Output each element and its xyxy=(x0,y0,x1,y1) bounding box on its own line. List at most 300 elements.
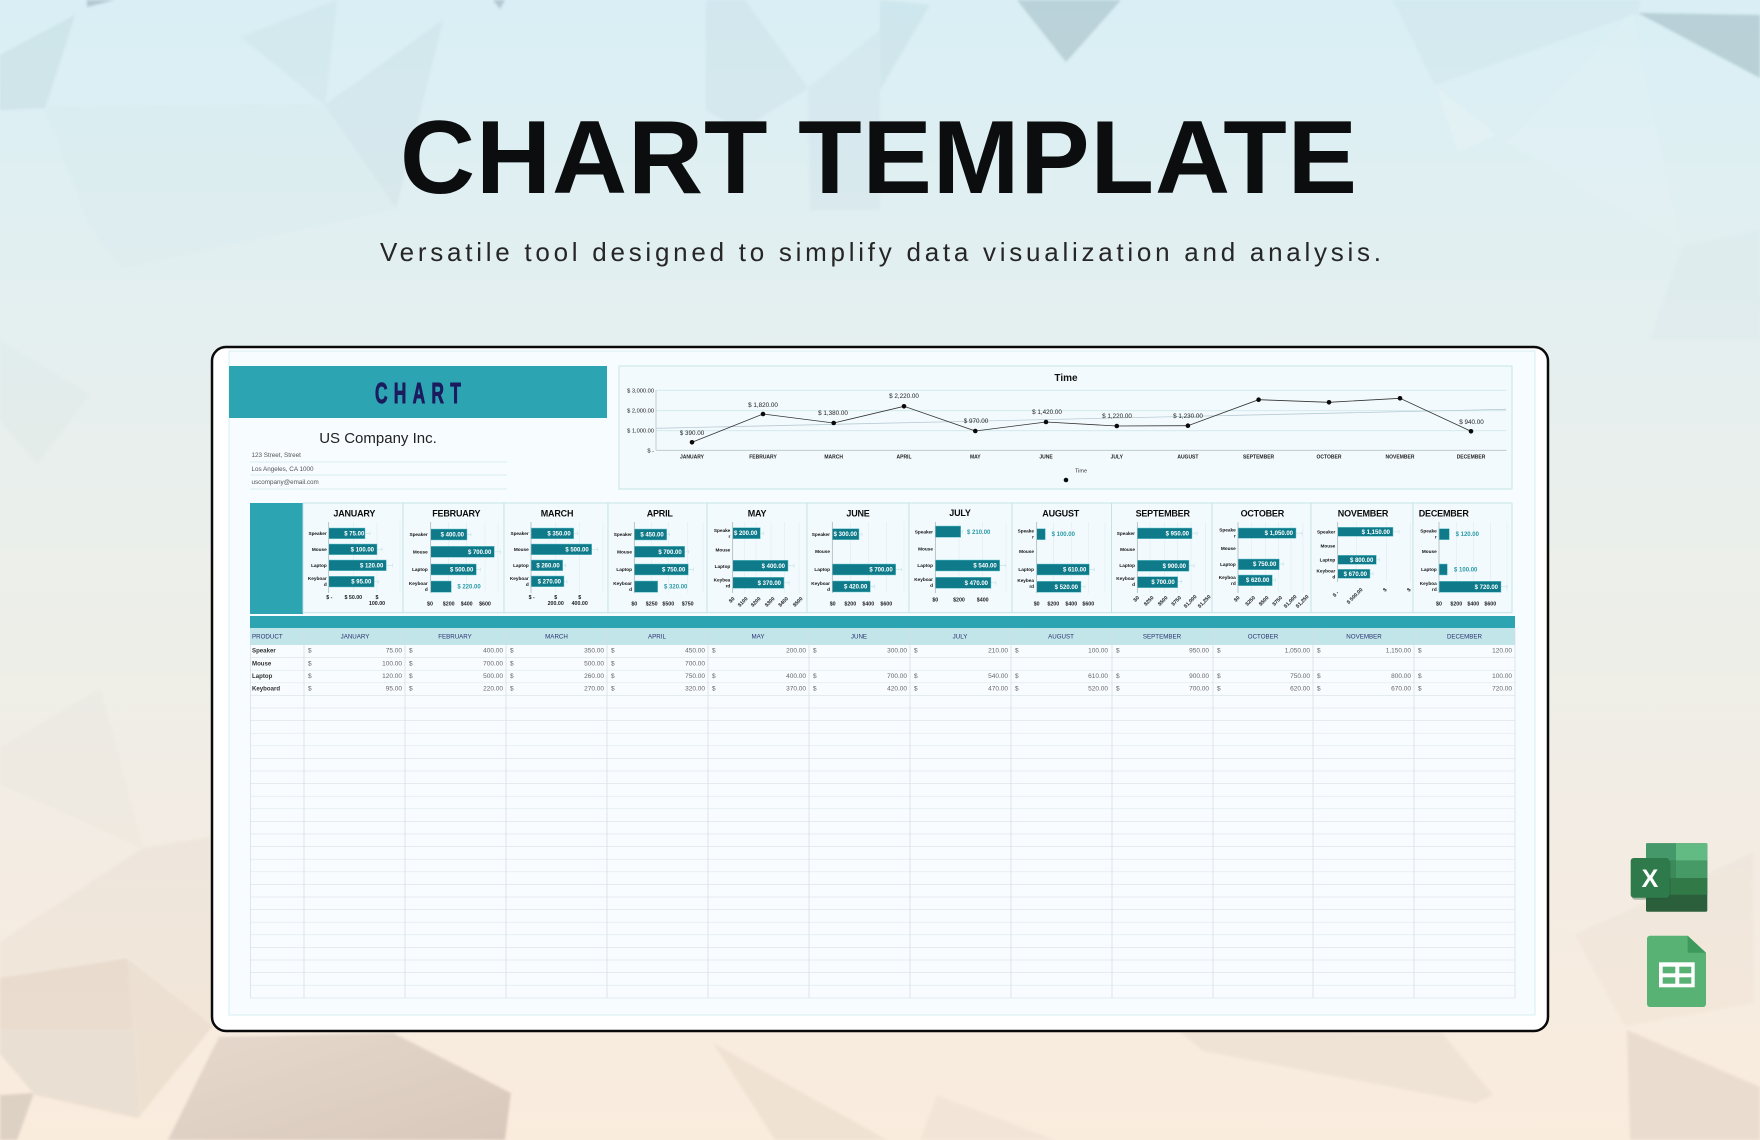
table header row: JUNE xyxy=(851,633,867,640)
month chart: September: $250 xyxy=(1143,595,1155,608)
month chart: March: Keyboar xyxy=(510,576,529,581)
month chart: December: $0 xyxy=(1436,602,1442,608)
line chart: Time: $ 2,000.00 xyxy=(627,408,654,414)
month chart: May: rd xyxy=(726,584,730,588)
month chart: September: $1,250 xyxy=(1197,594,1212,610)
month chart: March: Laptop xyxy=(513,563,529,568)
table row: Mouse: $ xyxy=(510,660,514,667)
table row: Speaker: $ xyxy=(1116,648,1120,655)
line chart: Time: $ 940.00 xyxy=(1459,419,1484,426)
line chart: Time: $ 1,380.00 xyxy=(818,410,848,417)
month chart: February xyxy=(403,503,504,613)
month chart: December: $400 xyxy=(1467,602,1479,608)
table row: Laptop: 500.00 xyxy=(483,673,503,680)
month chart: February: $ 400.00 xyxy=(441,532,465,538)
month chart: August: $ 100.00 xyxy=(1052,532,1076,538)
line chart: Time: FEBRUARY xyxy=(749,454,777,460)
table row: Speaker: 450.00 xyxy=(685,648,705,655)
month chart: December: DECEMBER xyxy=(1419,508,1469,518)
month chart: October: OCTOBER xyxy=(1241,508,1285,518)
line chart: Time: $ 1,230.00 xyxy=(1173,413,1203,420)
month chart: April xyxy=(608,503,707,613)
month chart: May: $ 370.00 xyxy=(758,581,782,587)
month chart: August: Keybea xyxy=(1017,578,1034,583)
table row: Laptop: $ xyxy=(1116,673,1120,680)
table row: Laptop: $ xyxy=(308,673,312,680)
line chart: Time: $ 3,000.00 xyxy=(627,388,654,394)
icon: Excel xyxy=(1631,843,1707,912)
month chart: December: $ 100.00 xyxy=(1454,568,1478,574)
month chart: May: $500 xyxy=(792,596,804,609)
icon: Google Sheets xyxy=(1647,936,1706,1007)
month chart: September: SEPTEMBER xyxy=(1136,508,1190,518)
table row: Keyboard: $ xyxy=(914,686,918,693)
month chart: May: $200 xyxy=(750,596,762,609)
data table xyxy=(250,616,1515,998)
line chart: Time: $ 1,220.00 xyxy=(1102,413,1132,420)
month chart: November: Laptop xyxy=(1320,558,1335,562)
month chart: June: d xyxy=(827,587,830,592)
month chart: April: $ 320.00 xyxy=(664,585,688,591)
month chart: May: $400 xyxy=(778,596,790,609)
month chart: August: AUGUST xyxy=(1042,508,1080,518)
month chart: May: Laptop xyxy=(715,564,730,569)
month chart: June: Laptop xyxy=(814,567,830,572)
table row: Keyboard: 700.00 xyxy=(1189,686,1209,693)
table row: Speaker: 1,050.00 xyxy=(1285,648,1310,655)
table row: Mouse: Mouse xyxy=(252,660,272,667)
month chart: September: Keyboar xyxy=(1116,576,1135,581)
table row: Keyboard: $ xyxy=(510,686,514,693)
table row: Keyboard xyxy=(252,686,1512,693)
month chart: April: $750 xyxy=(682,602,694,608)
month chart: April: d xyxy=(629,587,632,592)
month chart: August: $600 xyxy=(1082,602,1094,608)
month chart: January: Keyboar xyxy=(308,576,327,581)
month chart: December: Laptop xyxy=(1421,567,1437,572)
table row: Keyboard: Keyboard xyxy=(252,686,280,693)
month chart: March: $ 260.00 xyxy=(536,563,560,569)
month chart: May: MAY xyxy=(748,508,766,518)
month chart: May: $300 xyxy=(764,596,776,609)
month chart: November: $ xyxy=(1382,587,1388,593)
table row: Laptop: $ xyxy=(1217,673,1221,680)
month chart: April: Laptop xyxy=(616,567,632,572)
month chart: January: Speaker xyxy=(308,531,327,536)
month chart: October: Speake xyxy=(1219,528,1236,532)
month chart: October: $500 xyxy=(1258,595,1270,608)
line chart: Time: MARCH xyxy=(824,454,843,460)
table row: Laptop: 120.00 xyxy=(382,673,402,680)
line chart: Time: AUGUST xyxy=(1177,454,1198,460)
month chart: July xyxy=(909,503,1012,613)
line chart: Time: $ 1,000.00 xyxy=(627,428,654,434)
month chart: December: Mouse xyxy=(1422,549,1437,554)
month chart: January xyxy=(303,503,403,613)
month chart: July: $ 210.00 xyxy=(967,530,991,536)
month chart: January: $ 75.00 xyxy=(344,531,365,537)
month chart: August: r xyxy=(1032,534,1034,540)
month chart: September xyxy=(1112,503,1212,613)
table row: Laptop: $ xyxy=(914,673,918,680)
month chart: June: $600 xyxy=(880,602,892,608)
month chart: March: Speaker xyxy=(510,531,529,536)
table row: Laptop: 750.00 xyxy=(685,673,705,680)
table header row: OCTOBER xyxy=(1248,633,1279,640)
table row: Mouse: 700.00 xyxy=(685,660,705,667)
table row: Keyboard: $ xyxy=(712,686,716,693)
table row: Laptop: $ xyxy=(611,673,615,680)
table row: Speaker: $ xyxy=(308,648,312,655)
month chart: January: $ 95.00 xyxy=(351,580,372,586)
month chart: March: 400.00 xyxy=(572,601,588,607)
line chart: Time: DECEMBER xyxy=(1457,454,1486,460)
month chart: September: $750 xyxy=(1171,595,1183,608)
month chart: May: $ 400.00 xyxy=(762,564,786,570)
table row: Speaker: 75.00 xyxy=(386,648,402,655)
month chart: January: $ 120.00 xyxy=(360,563,384,569)
table row: Keyboard: 620.00 xyxy=(1290,686,1310,693)
month chart: April: $250 xyxy=(646,602,658,608)
month chart: January: Laptop xyxy=(311,563,327,568)
table row: Laptop: 100.00 xyxy=(1492,673,1512,680)
table row: Laptop: 610.00 xyxy=(1088,673,1108,680)
line chart: Time: JULY xyxy=(1111,454,1124,460)
table row: Mouse: $ xyxy=(611,660,615,667)
line chart: Time: Time xyxy=(1054,373,1078,384)
table row: Speaker: $ xyxy=(813,648,817,655)
month chart: December xyxy=(1413,503,1512,613)
month chart: August: $0 xyxy=(1034,602,1040,608)
month chart: February: d xyxy=(425,587,428,592)
month chart: February: Laptop xyxy=(412,567,428,572)
line chart: Time: NOVEMBER xyxy=(1386,454,1415,460)
table row: Keyboard: 670.00 xyxy=(1391,686,1411,693)
table row: Keyboard: $ xyxy=(1418,686,1422,693)
month chart: October: $ 620.00 xyxy=(1246,578,1270,584)
month chart: November: $ 500.00 xyxy=(1346,587,1364,606)
table header row: PRODUCT xyxy=(252,633,283,640)
month chart: October: $750 xyxy=(1272,595,1284,608)
month chart: July: JULY xyxy=(949,508,971,518)
month chart: August: rd xyxy=(1029,584,1034,589)
month chart: August: $200 xyxy=(1047,602,1059,608)
line chart: Time: Time xyxy=(1075,469,1087,475)
table row: Speaker: 300.00 xyxy=(887,648,907,655)
table row: Keyboard: $ xyxy=(1217,686,1221,693)
month chart: December: Keyboa xyxy=(1420,581,1437,586)
table row: Keyboard: 420.00 xyxy=(887,686,907,693)
month chart: April: Keyboar xyxy=(613,581,632,586)
month chart: September: $ 950.00 xyxy=(1166,531,1190,537)
month chart: October: Mouse xyxy=(1221,546,1236,551)
month chart: March: MARCH xyxy=(541,508,573,518)
line chart: Time: $ 2,220.00 xyxy=(889,393,919,400)
table row: Speaker: $ xyxy=(611,648,615,655)
table row: Laptop: 260.00 xyxy=(584,673,604,680)
table row: Keyboard: 720.00 xyxy=(1492,686,1512,693)
month chart: April: Speaker xyxy=(614,532,632,537)
table row: Laptop: 700.00 xyxy=(887,673,907,680)
month chart: March: $ 500.00 xyxy=(565,547,589,553)
table row: Laptop: 400.00 xyxy=(786,673,806,680)
table row: Keyboard: $ xyxy=(409,686,413,693)
month chart: March: $ 270.00 xyxy=(538,579,562,585)
month chart: February: $200 xyxy=(443,602,455,608)
month chart: May: Speake xyxy=(714,528,731,533)
line chart: Time: JANUARY xyxy=(680,454,705,460)
month chart: October: Keyboa xyxy=(1219,575,1236,580)
month chart: May xyxy=(707,503,807,613)
month chart: June: Keyboar xyxy=(811,581,830,586)
month chart: November xyxy=(1311,503,1413,613)
month chart: July: $ 540.00 xyxy=(973,564,997,570)
table row: Speaker: 210.00 xyxy=(988,648,1008,655)
table row: Laptop: 540.00 xyxy=(988,673,1008,680)
table row: Laptop: $ xyxy=(510,673,514,680)
line chart: Time xyxy=(619,366,1512,489)
table row: Mouse: 500.00 xyxy=(584,660,604,667)
month chart: February: $ 700.00 xyxy=(468,550,492,556)
table row: Keyboard: 95.00 xyxy=(386,686,402,693)
month chart: October: $1,000 xyxy=(1283,594,1298,610)
month chart: December: $ 720.00 xyxy=(1475,585,1499,591)
month chart: June: $ 700.00 xyxy=(869,568,893,574)
month chart: May: $ 200.00 xyxy=(734,531,758,537)
table row: Speaker: 100.00 xyxy=(1088,648,1108,655)
month chart: October: $1,250 xyxy=(1295,594,1310,610)
table row: Mouse: $ xyxy=(308,660,312,667)
month chart: July: $0 xyxy=(932,597,938,603)
month chart: August: $ 520.00 xyxy=(1055,585,1079,591)
month chart: October xyxy=(1212,503,1311,613)
month chart: March: Mouse xyxy=(514,547,529,552)
table row: Keyboard: 370.00 xyxy=(786,686,806,693)
month chart: June: $400 xyxy=(862,602,874,608)
title: CHART TEMPLATE xyxy=(400,100,1357,216)
month chart: September: Speaker xyxy=(1117,531,1135,536)
month chart: July: $ 470.00 xyxy=(965,581,989,587)
table row: Laptop: $ xyxy=(712,673,716,680)
table row: Keyboard: 270.00 xyxy=(584,686,604,693)
month chart: March: $ xyxy=(578,595,581,601)
month chart: December: rd xyxy=(1432,587,1437,592)
table header row: JANUARY xyxy=(341,633,369,640)
table row: Laptop: $ xyxy=(1317,673,1321,680)
month chart: April: APRIL xyxy=(647,508,673,518)
table row: Speaker: $ xyxy=(409,648,413,655)
month chart: October: rd xyxy=(1231,581,1236,586)
month chart: January: $ 100.00 xyxy=(351,547,375,553)
month chart: October: $250 xyxy=(1245,595,1257,608)
month chart: February: $400 xyxy=(461,602,473,608)
month chart: August: $400 xyxy=(1065,602,1077,608)
month chart: September: $ 700.00 xyxy=(1151,580,1175,586)
month chart: June: Mouse xyxy=(815,549,830,554)
company block xyxy=(250,430,507,489)
month chart: April: $ 750.00 xyxy=(662,568,686,574)
month chart: March: 200.00 xyxy=(548,601,564,607)
table row: Speaker: $ xyxy=(510,648,514,655)
table row: Laptop: $ xyxy=(409,673,413,680)
table header row: MAY xyxy=(752,633,764,640)
month chart: March: $ xyxy=(554,595,557,601)
month chart: November: NOVEMBER xyxy=(1338,508,1389,518)
month chart: August xyxy=(1012,503,1112,613)
month chart: January: $ xyxy=(376,595,379,601)
month chart: March: d xyxy=(526,582,529,587)
table row: Speaker: Speaker xyxy=(252,648,276,655)
month chart: May: Keybea xyxy=(714,578,731,582)
table row: Laptop: 800.00 xyxy=(1391,673,1411,680)
month chart: November: Keyboar xyxy=(1317,568,1335,574)
month chart: June: JUNE xyxy=(846,508,870,518)
line chart: Time: $ 1,420.00 xyxy=(1032,409,1062,416)
month chart: September: $0 xyxy=(1133,595,1141,604)
month chart: February: Mouse xyxy=(413,550,428,554)
month chart: September: $500 xyxy=(1157,595,1169,608)
month chart: July: Speaker xyxy=(915,530,933,534)
table row: Keyboard: $ xyxy=(611,686,615,693)
month chart: January: d xyxy=(324,582,327,587)
month chart: May: Mouse xyxy=(715,547,731,552)
subtitle: Versatile tool designed to simplify data visualization and analysis. xyxy=(380,237,1381,267)
month chart: April: $ 700.00 xyxy=(658,550,682,556)
table row: Speaker: 950.00 xyxy=(1189,648,1209,655)
month chart: August: $ 610.00 xyxy=(1063,568,1087,574)
month chart: October: Laptop xyxy=(1220,562,1236,567)
line chart: Time: MAY xyxy=(970,454,981,460)
table row: Laptop: Laptop xyxy=(252,673,273,680)
month chart: December: $ 120.00 xyxy=(1456,532,1480,538)
icon: Excel: X xyxy=(1642,865,1659,893)
teal side block xyxy=(250,503,303,614)
month chart: February: $0 xyxy=(427,602,433,608)
month chart: November: d xyxy=(1332,574,1335,580)
month chart: December: $200 xyxy=(1450,602,1462,608)
table row: Laptop: $ xyxy=(1015,673,1019,680)
table row: Laptop: $ xyxy=(813,673,817,680)
month chart: February: $600 xyxy=(479,602,491,608)
month chart: November: $ 1,150.00 xyxy=(1362,530,1391,536)
table row: Mouse: 100.00 xyxy=(382,660,402,667)
table header row: DECEMBER xyxy=(1447,633,1483,640)
month chart: October: $ 1,050.00 xyxy=(1265,531,1294,537)
table header row: NOVEMBER xyxy=(1346,633,1382,640)
month chart: July: $400 xyxy=(977,597,989,603)
table row: Laptop: $ xyxy=(1418,673,1422,680)
month chart: May: r xyxy=(728,534,730,539)
month chart: June xyxy=(807,503,909,613)
table row: Speaker: $ xyxy=(914,648,918,655)
table row: Speaker: 350.00 xyxy=(584,648,604,655)
month chart: January: $ 50.00 xyxy=(344,595,362,601)
chart banner: CHART xyxy=(375,378,467,410)
company block: uscompany@email.com xyxy=(252,479,319,486)
month chart: November: $ 670.00 xyxy=(1344,572,1368,578)
month chart: November: $ 800.00 xyxy=(1350,558,1374,564)
line chart: Time: $ 390.00 xyxy=(680,430,705,437)
month chart: June: $0 xyxy=(830,602,836,608)
table header row: MARCH xyxy=(545,633,568,640)
month chart: June: Speaker xyxy=(812,532,830,537)
table row: Speaker: 400.00 xyxy=(483,648,503,655)
table row: Keyboard: $ xyxy=(1015,686,1019,693)
month chart: September: Mouse xyxy=(1120,547,1135,552)
table row: Keyboard: $ xyxy=(1116,686,1120,693)
month chart: September: $1,000 xyxy=(1183,594,1198,610)
month chart: February: $ 220.00 xyxy=(457,585,481,591)
table row: Mouse: 700.00 xyxy=(483,660,503,667)
panel: spreadsheet frame xyxy=(212,347,1548,1031)
table row: Speaker: 1,150.00 xyxy=(1386,648,1411,655)
company block: 123 Street, Street xyxy=(252,452,301,459)
month chart: July: Laptop xyxy=(917,563,933,568)
month chart: September: d xyxy=(1132,582,1135,587)
line chart: Time: $ - xyxy=(647,448,654,454)
month chart: December: $600 xyxy=(1484,602,1496,608)
month chart: February: Speaker xyxy=(409,532,428,537)
table header row: FEBRUARY xyxy=(438,633,472,640)
month chart: February: FEBRUARY xyxy=(432,508,481,518)
line chart: Time: $ 970.00 xyxy=(964,418,989,425)
line chart: Time: JUNE xyxy=(1039,454,1053,460)
table row: Mouse: $ xyxy=(409,660,413,667)
month chart: November: $ xyxy=(1406,587,1412,593)
table row: Speaker: 200.00 xyxy=(786,648,806,655)
table header row: SEPTEMBER xyxy=(1143,633,1182,640)
table row: Keyboard: 470.00 xyxy=(988,686,1008,693)
month chart: June: $200 xyxy=(844,602,856,608)
month chart: July: Mouse xyxy=(918,546,933,552)
month chart: July: $200 xyxy=(953,597,965,603)
table row: Speaker: 120.00 xyxy=(1492,648,1512,655)
line chart: Time: APRIL xyxy=(896,454,912,460)
month chart: August: Laptop xyxy=(1018,567,1034,572)
table row: Speaker: $ xyxy=(1015,648,1019,655)
line chart: Time: OCTOBER xyxy=(1317,454,1342,460)
company block: US Company Inc. xyxy=(319,430,437,447)
table row: Speaker: $ xyxy=(1317,648,1321,655)
table row: Laptop xyxy=(252,673,1512,680)
chart banner xyxy=(229,366,607,418)
month chart: June: $ 420.00 xyxy=(844,584,868,590)
table row: Laptop: 900.00 xyxy=(1189,673,1209,680)
table row: Keyboard: $ xyxy=(813,686,817,693)
month chart: October: r xyxy=(1234,534,1236,538)
line chart: Time: $ 1,820.00 xyxy=(748,402,778,409)
month chart: March: $ - xyxy=(529,595,535,601)
month chart: April: Mouse xyxy=(617,550,632,554)
table row: Keyboard: $ xyxy=(308,686,312,693)
month chart: January: 100.00 xyxy=(369,601,385,607)
table row: Mouse xyxy=(252,660,705,667)
table header row: APRIL xyxy=(648,633,666,640)
month chart: December: Speake xyxy=(1420,528,1437,534)
month chart: March: $ 350.00 xyxy=(547,531,571,537)
month chart: September: Laptop xyxy=(1119,563,1135,568)
month chart: April: $500 xyxy=(662,602,674,608)
table row: Keyboard: $ xyxy=(1317,686,1321,693)
month chart: July: Keyboar xyxy=(914,577,933,582)
month chart: August: Mouse xyxy=(1019,549,1034,554)
month chart: May: $0 xyxy=(728,596,736,605)
table row: Keyboard: 320.00 xyxy=(685,686,705,693)
line chart: Time: SEPTEMBER xyxy=(1243,454,1275,460)
month chart: November: $ - xyxy=(1332,590,1341,599)
month chart: October: $ 750.00 xyxy=(1253,562,1277,568)
month chart: December: r xyxy=(1435,534,1437,540)
